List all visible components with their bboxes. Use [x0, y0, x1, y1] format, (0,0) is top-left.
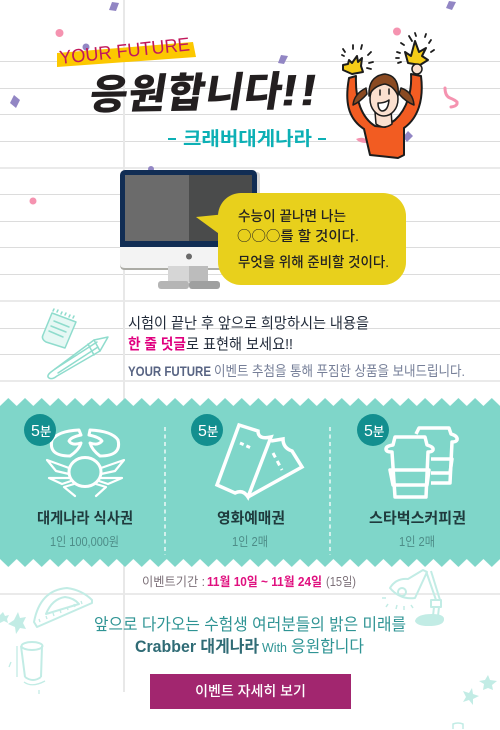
title: 응원합니다 — [87, 69, 286, 118]
monitor — [120, 170, 260, 289]
bubble text — [237, 208, 389, 270]
mouth and eyes — [378, 100, 389, 111]
speech bubble — [196, 193, 406, 285]
icon: protractor — [34, 588, 92, 627]
face — [370, 82, 398, 116]
closing message — [94, 615, 406, 656]
banner: YOUR FUTURE: YOUR FUTURE — [58, 34, 191, 69]
title: !! — [276, 66, 322, 116]
button — [150, 674, 351, 709]
intro text: 한 줄 덧글 — [128, 336, 186, 353]
panel: prizes — [0, 398, 500, 567]
closing message: With — [262, 640, 287, 655]
bubble text: ○○○를 할 것이다. — [237, 226, 359, 246]
icon: tickets — [217, 425, 302, 497]
intro text — [128, 315, 465, 379]
prize: movie tickets: 1인 2매 — [232, 535, 268, 549]
confetti — [10, 1, 457, 204]
prize: movie tickets: 영화예매권 — [217, 510, 285, 527]
prize: crab — [24, 414, 133, 549]
bubble text: 무엇을 위해 준비할 것이다. — [238, 254, 389, 270]
button: 이벤트 자세히 보기 — [195, 683, 306, 699]
badge: 5분 — [198, 423, 218, 440]
closing message: Crabber 대게나라 — [135, 637, 259, 656]
icon: coffee cups — [386, 428, 457, 497]
intro text: 로 표현해 보세요!! — [186, 336, 293, 353]
icon: desk lamp — [382, 570, 443, 625]
event period: 이벤트기간 : — [142, 575, 205, 589]
subtitle: 크래버대게나라 — [183, 128, 313, 150]
arms and body — [347, 74, 422, 158]
event period: (15일) — [326, 575, 356, 589]
icon: stars left — [0, 612, 26, 634]
intro text: 이벤트 추첨을 통해 푸짐한 상품을 보내드립니다. — [214, 363, 465, 379]
prize: coffee vouchers: 스타벅스커피권 — [369, 510, 466, 527]
prize: coffee vouchers: 1인 2매 — [399, 535, 435, 549]
hand left — [343, 56, 363, 74]
bubble text: 수능이 끝나면 나는 — [238, 208, 346, 224]
character: cheering girl — [342, 33, 434, 158]
prize: crab: 대게나라 식사권 — [37, 510, 133, 527]
hand right — [405, 41, 428, 65]
event period: 11월 10일 ~ 11월 24일 — [207, 574, 322, 589]
icon: small cup bottom right — [453, 723, 463, 729]
badge: 5분 — [364, 423, 384, 440]
pigtails — [353, 88, 414, 105]
icon: notepad and pencil — [42, 309, 108, 379]
badge: 5분 — [31, 423, 51, 440]
hair — [369, 74, 398, 96]
prize: crab: 1인 100,000원 — [50, 535, 119, 549]
prize: coffee vouchers — [357, 414, 466, 549]
icon: crab — [47, 430, 124, 496]
motion marks — [342, 33, 434, 69]
icon: cylinder — [9, 642, 45, 694]
event period — [142, 574, 356, 589]
neck — [375, 110, 392, 127]
intro text: YOUR FUTURE — [128, 363, 211, 379]
closing message: 앞으로 다가오는 수험생 여러분들의 밝은 미래를 — [94, 615, 406, 634]
icon: stars right — [463, 675, 497, 705]
closing message: 응원합니다 — [291, 637, 364, 656]
prize: movie tickets — [191, 414, 302, 549]
intro text: 시험이 끝난 후 앞으로 희망하시는 내용을 — [128, 315, 369, 332]
